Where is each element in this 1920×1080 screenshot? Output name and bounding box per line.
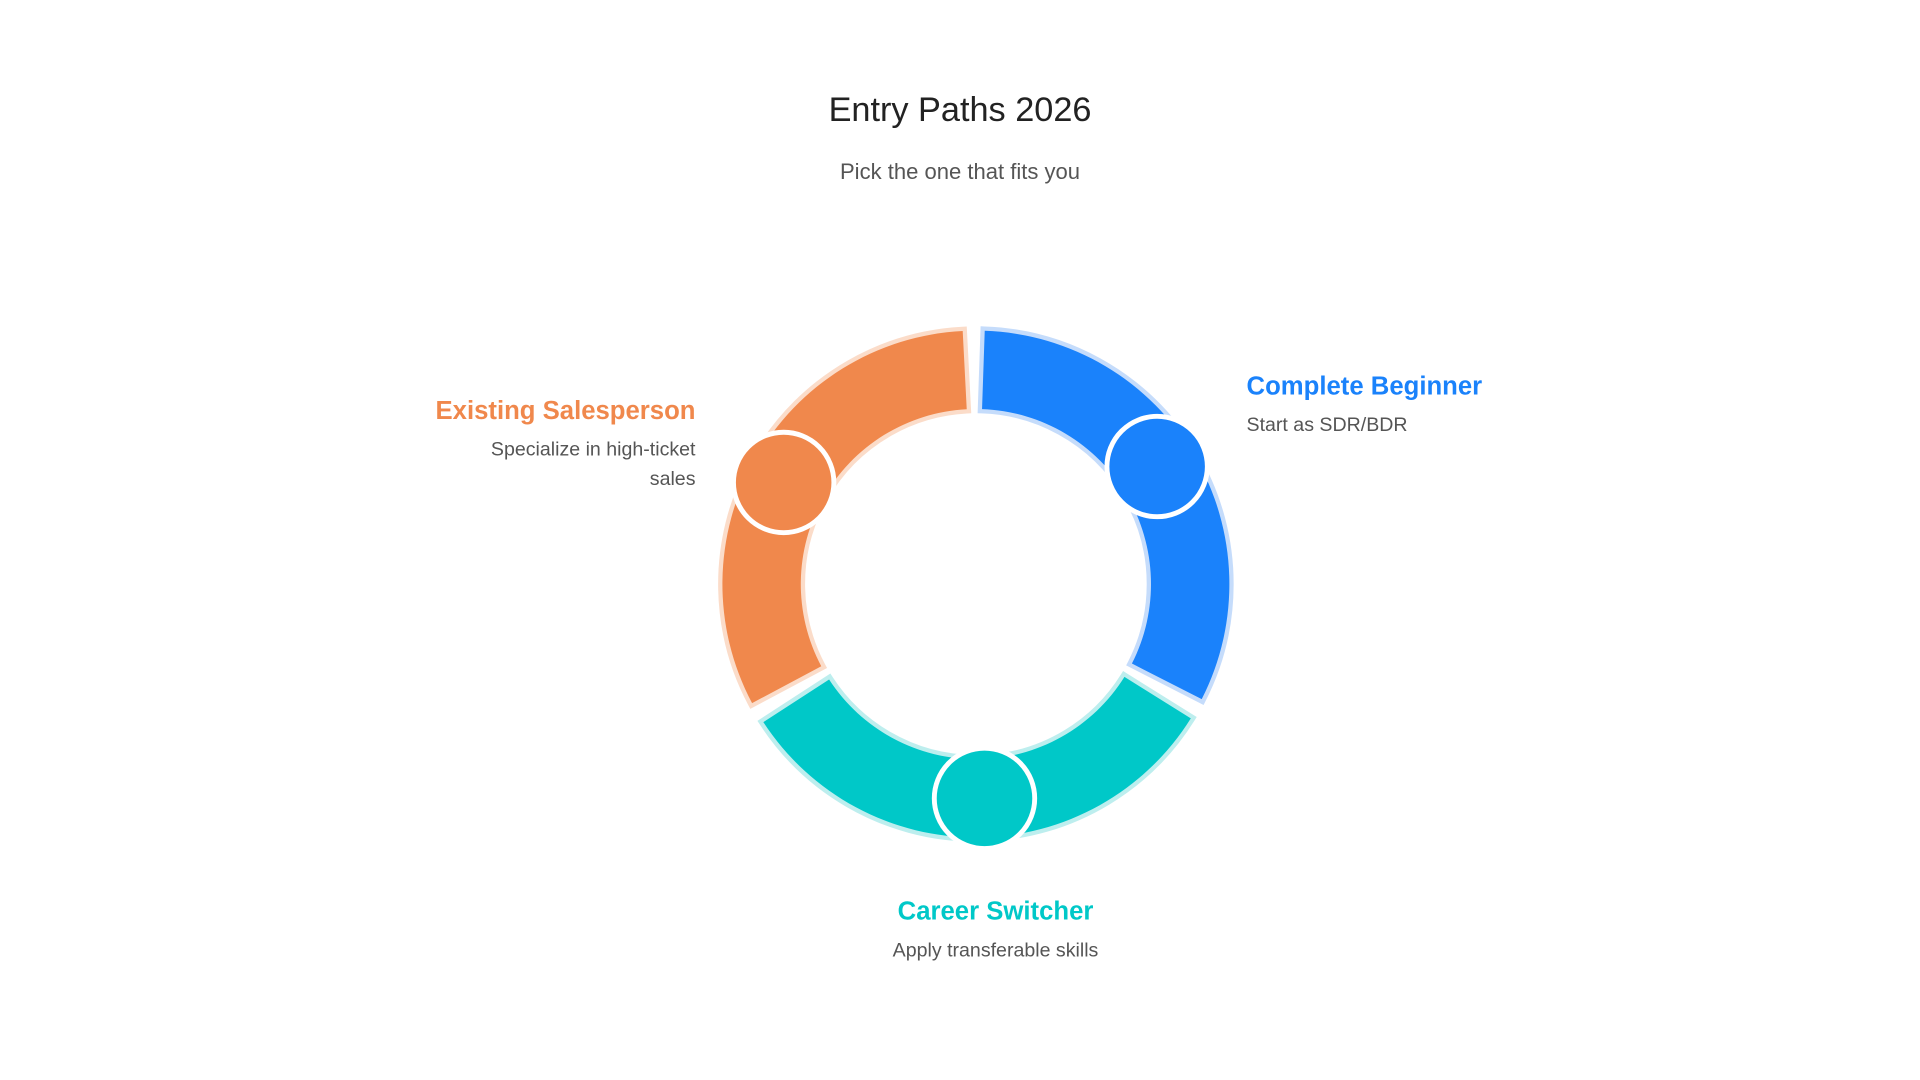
- marker: blue circle: [1107, 416, 1207, 517]
- label: existing salesperson: sales: [650, 468, 696, 490]
- label: career switcher: Apply transferable skills: [893, 939, 1099, 961]
- marker: teal circle: [934, 748, 1035, 849]
- label: existing salesperson: Existing Salesperson: [436, 397, 696, 425]
- title: Entry Paths 2026: [829, 91, 1091, 129]
- segment: complete beginner: [982, 331, 1229, 699]
- marker: orange circle: [733, 432, 834, 533]
- segment: existing salesperson: [722, 331, 967, 703]
- label: complete beginner: [1247, 372, 1482, 436]
- label: existing salesperson: Specialize in high-ticket: [491, 439, 696, 461]
- segment: career switcher: [763, 677, 1191, 837]
- label: complete beginner: Start as SDR/BDR: [1247, 414, 1408, 436]
- label: complete beginner: Complete Beginner: [1247, 372, 1482, 400]
- label: existing salesperson: [436, 397, 696, 490]
- subtitle: Pick the one that fits you: [840, 159, 1080, 184]
- ring chart: [722, 331, 1229, 849]
- label: career switcher: Career Switcher: [898, 898, 1093, 926]
- label: career switcher: [893, 898, 1099, 961]
